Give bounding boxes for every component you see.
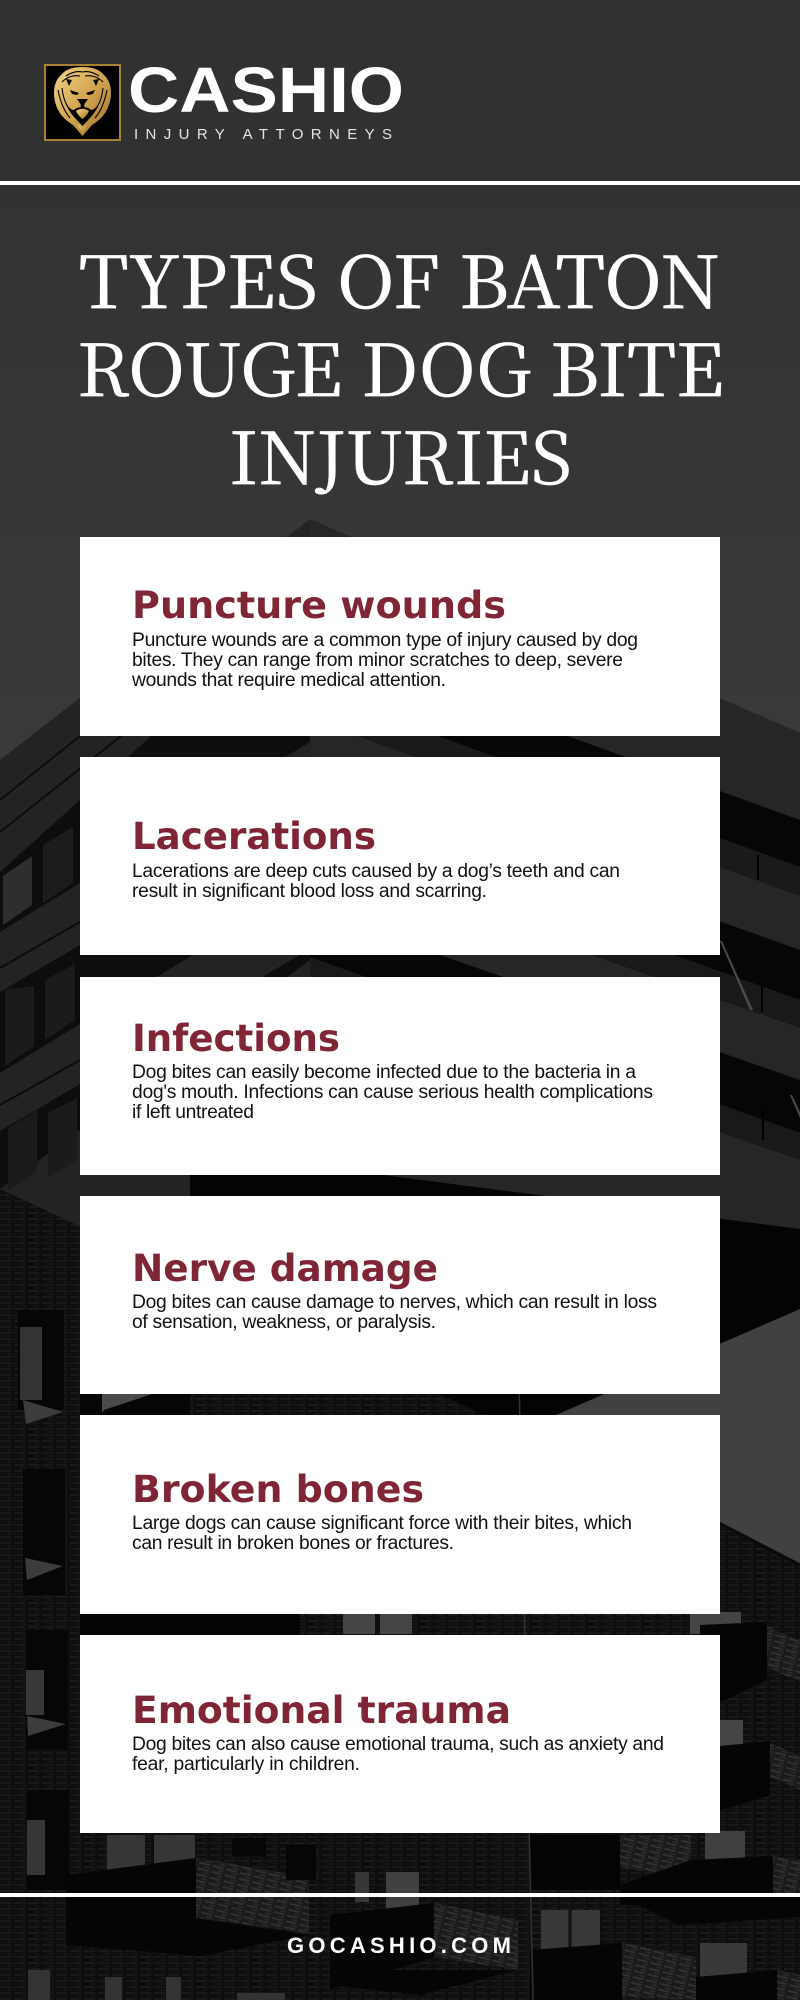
heading: broken bones: Broken bones [132, 1468, 424, 1511]
heading: emotional trauma: Emotional trauma [132, 1689, 511, 1732]
panel: emotional trauma [80, 1635, 720, 1833]
left facade [0, 519, 310, 1500]
text: infections [132, 1062, 653, 1123]
header band [0, 0, 800, 181]
panel: infections [80, 977, 720, 1175]
text: emotional trauma: fear, particularly in children. [132, 1754, 360, 1775]
text: nerve damage: of sensation, weakness, or paralysis. [132, 1312, 436, 1333]
bottom divider [0, 1893, 800, 1897]
text: puncture wounds: bites. They can range from minor scratches to deep, severe [132, 650, 623, 671]
brick building right [530, 1425, 800, 2000]
title: ROUGE DOG BITE [77, 313, 724, 417]
panel: broken bones [80, 1415, 720, 1614]
heading: puncture wounds: Puncture wounds [132, 584, 506, 627]
right facade [190, 519, 800, 1415]
text: lacerations: result in significant blood loss and scarring. [132, 881, 487, 902]
title: TYPES OF BATON [79, 225, 720, 329]
panel: puncture wounds [80, 537, 720, 736]
heading: lacerations: Lacerations [132, 815, 376, 858]
sky wedge [530, 1309, 800, 1565]
panel: lacerations [80, 757, 720, 955]
footer website: GOCASHIO.COM [287, 1933, 511, 1958]
logo wordmark: CASHIO [128, 54, 404, 126]
text: emotional trauma: Dog bites can also cause emotional trauma, such as anxiety and [132, 1734, 664, 1755]
text: infections: Dog bites can easily become infected due to the bacteria in a [132, 1062, 636, 1083]
text: puncture wounds: wounds that require medical attention. [131, 670, 446, 691]
text: lacerations: Lacerations are deep cuts caused by a dog’s teeth and can [132, 861, 620, 882]
lower balconies [28, 1380, 533, 2000]
text: infections: dog's mouth. Infections can cause serious health complications [132, 1082, 653, 1103]
logo: lion emblem [45, 65, 120, 140]
text: broken bones [132, 1513, 632, 1554]
title: INJURIES [229, 401, 572, 505]
text: broken bones: Large dogs can cause significant force with their bites, which [132, 1513, 632, 1534]
text: nerve damage [132, 1292, 657, 1333]
text: puncture wounds [131, 630, 638, 691]
heading: nerve damage: Nerve damage [132, 1247, 438, 1290]
text: infections: if left untreated [132, 1102, 254, 1123]
text: puncture wounds: Puncture wounds are a common type of injury caused by dog [132, 630, 638, 651]
heading: infections: Infections [132, 1017, 340, 1060]
logo tagline: INJURY ATTORNEYS [134, 126, 392, 143]
top divider [0, 181, 800, 185]
text: lacerations [132, 861, 620, 902]
text: emotional trauma [132, 1734, 664, 1775]
panel: nerve damage [80, 1196, 720, 1394]
text: broken bones: can result in broken bones or fractures. [132, 1533, 454, 1554]
text: nerve damage: Dog bites can cause damage to nerves, which can result in loss [132, 1292, 657, 1313]
title [77, 225, 724, 505]
brick building left [0, 1189, 530, 2000]
